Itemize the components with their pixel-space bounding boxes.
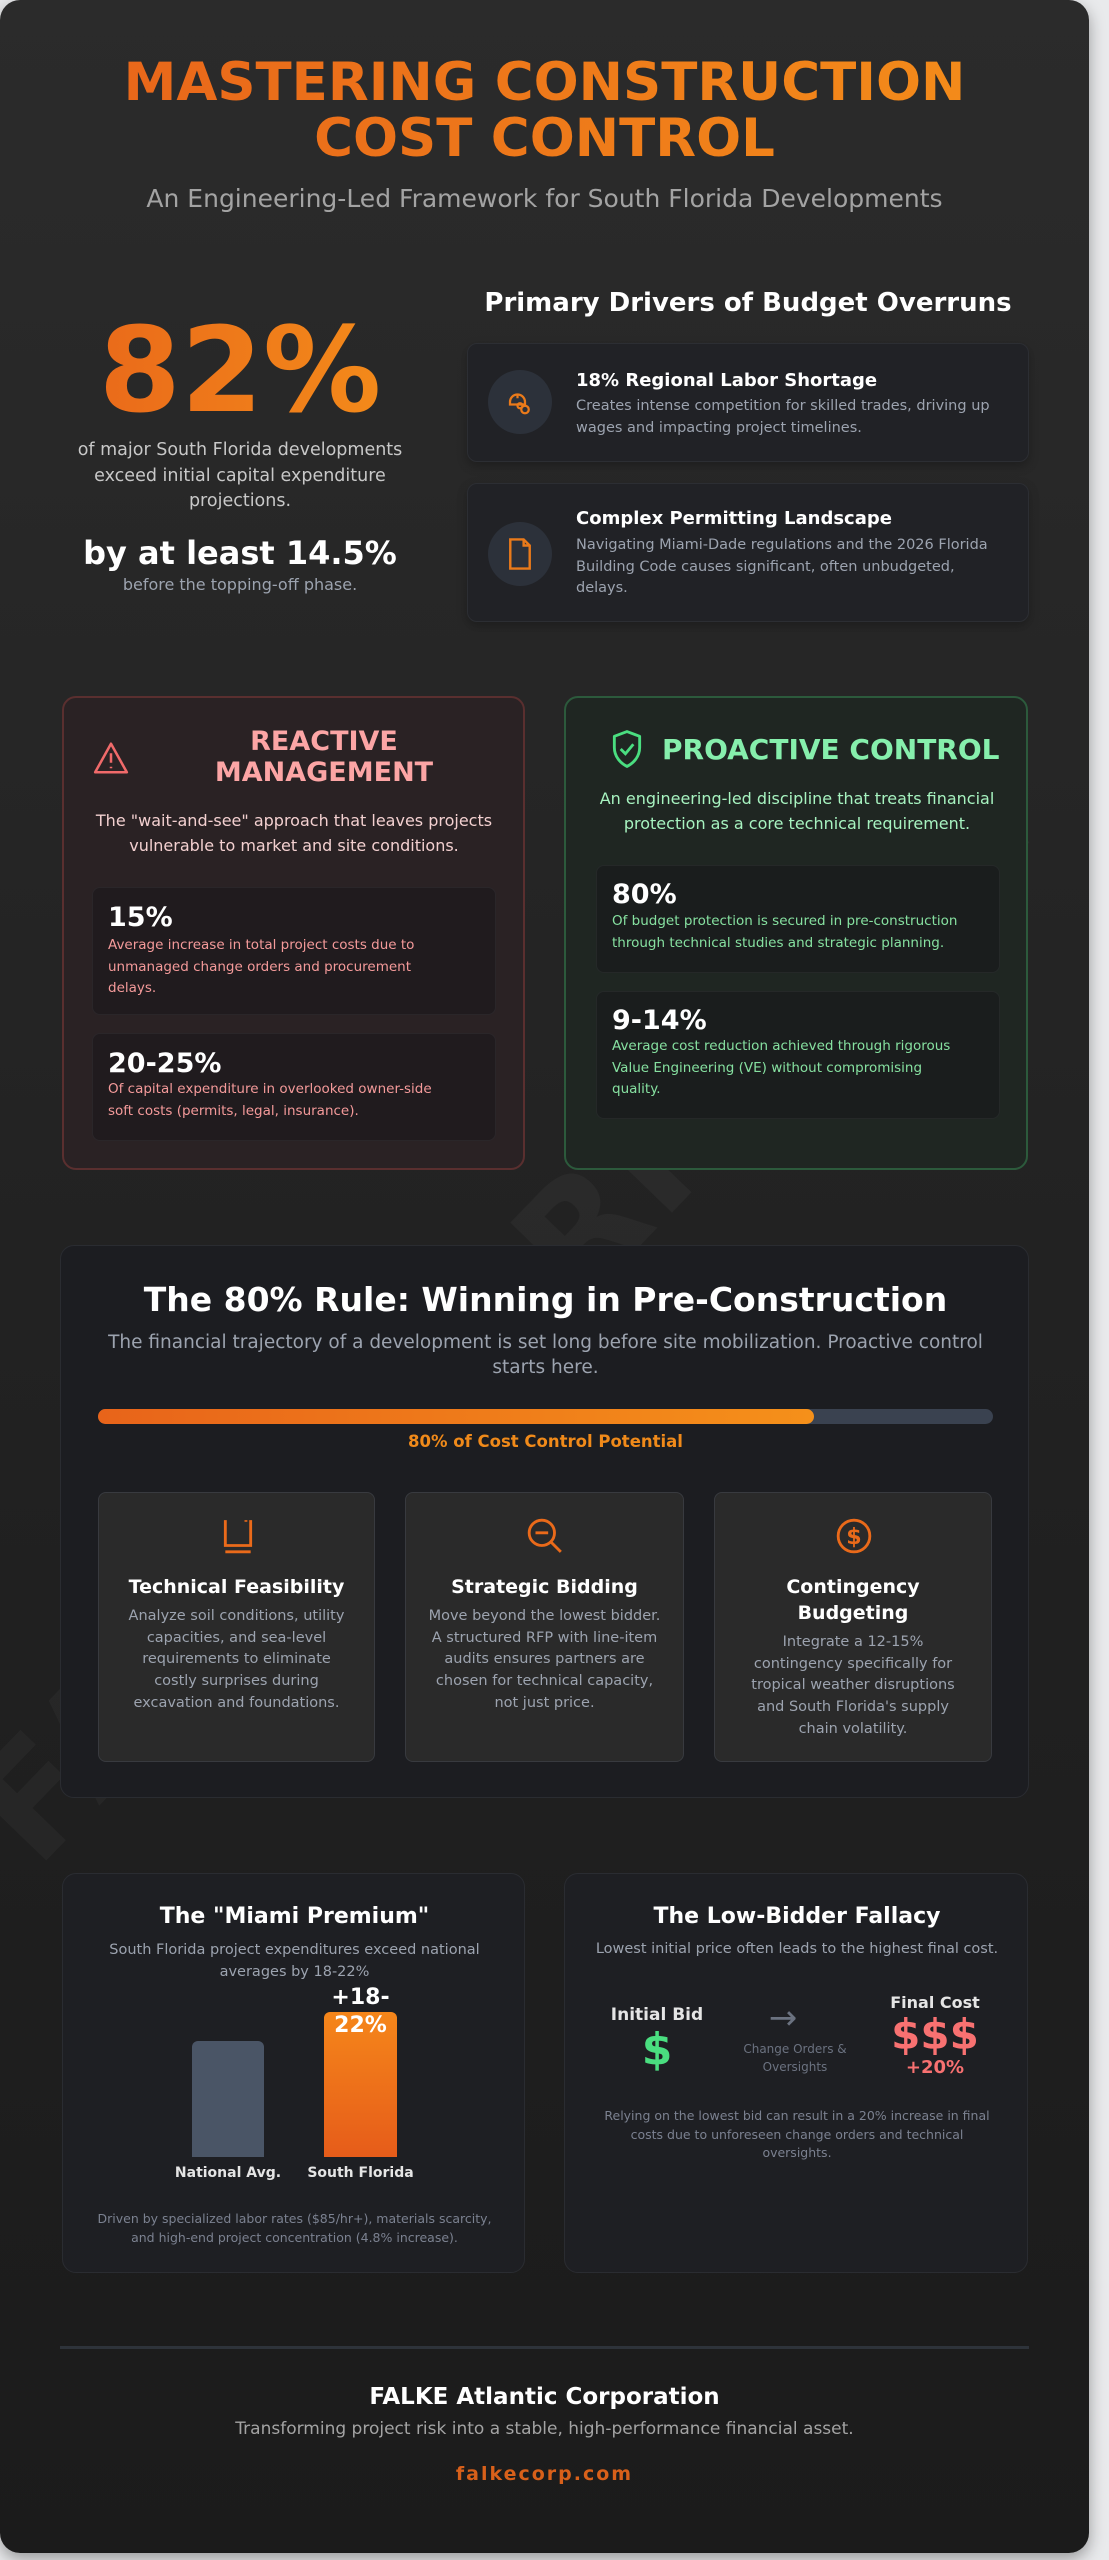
footer: FALKE Atlantic Corporation: [369, 2384, 720, 2410]
heading: primary drivers: Primary Drivers of Budget Overruns: [484, 288, 1012, 318]
card: strategic bidding: [405, 1492, 684, 1762]
description: An engineering-led discipline that treats financial protection as a core technical requirement.: [600, 789, 994, 833]
footnote: Relying on the lowest bid can result in a 20% increase in final costs due to unforeseen change orders and technical oversights.: [604, 2108, 990, 2160]
panel: low-bidder fallacy: Lowest initial price often leads to the highest final cost.: [596, 1941, 998, 1957]
stat: 82%: before the topping-off phase.: [123, 575, 357, 594]
bar chart: [175, 1985, 414, 2181]
stat: 9-14%: [596, 991, 1000, 1119]
heading: [215, 726, 433, 788]
panel: proactive control: [564, 696, 1028, 1170]
panel: miami premium: The "Miami Premium": [160, 1904, 429, 1929]
initial bid: $: [642, 2024, 672, 2075]
panel: driver permitting: Complex Permitting Landscape: [576, 508, 892, 529]
final cost: $$$: [891, 2010, 979, 2059]
stat: 15%: [92, 887, 496, 1015]
panel: driver permitting: [467, 483, 1029, 622]
stat: 82%: by at least 14.5%: [83, 534, 397, 572]
subtitle: The financial trajectory of a development is set long before site mobilization. Proactive control starts here.: [108, 1332, 983, 1378]
arrow: Change Orders &: [743, 2042, 847, 2056]
panel: miami premium: South Florida project expenditures exceed national averages by 18-22%: [109, 1942, 480, 1980]
card: contingency budgeting: Integrate a 12-15% contingency specifically for tropical weather disruptions and South Florida's supply chain volatility.: [751, 1634, 955, 1737]
description: The "wait-and-see" approach that leaves projects vulnerable to market and site conditions.: [96, 811, 492, 855]
footer: falkecorp.com: [456, 2463, 633, 2485]
footer: Transforming project risk into a stable, high-performance financial asset.: [235, 2419, 854, 2439]
arrow: [743, 1998, 847, 2074]
card: technical feasibility: Technical Feasibility: [129, 1576, 344, 1598]
card: technical feasibility: [98, 1492, 375, 1762]
bar chart: South Florida: [307, 2165, 414, 2181]
icon: beaker: [224, 1520, 252, 1554]
icon: document: [488, 522, 552, 586]
stat: 20-25%: [92, 1033, 496, 1141]
stat: 80%: [596, 865, 1000, 973]
icon: shield: [612, 730, 642, 768]
final cost: [890, 1993, 980, 2078]
stat: 82%: of major South Florida developments exceed initial capital expenditure projections.: [78, 440, 402, 511]
title: [0, 55, 1089, 167]
card: technical feasibility: Analyze soil conditions, utility capacities, and sea-level requirements to eliminate costly surprises during excavation and foundations.: [129, 1608, 344, 1711]
bar chart: +18-: [331, 1985, 390, 2010]
icon: warning: [94, 742, 128, 774]
card: contingency budgeting: Budgeting: [798, 1602, 908, 1624]
bar chart: 22%: [334, 2013, 387, 2038]
stat: 80%: 80%: [612, 879, 677, 910]
progress bar: [98, 1409, 993, 1424]
panel: reactive management: [62, 696, 525, 1170]
subtitle: An Engineering-Led Framework for South Florida Developments: [146, 184, 943, 213]
stat: 15%: Average increase in total project costs due to unmanaged change orders and procurement delays.: [108, 937, 414, 996]
card: contingency budgeting: Contingency: [786, 1576, 920, 1598]
panel: miami premium: [62, 1873, 525, 2273]
stat: 9-14%: 9-14%: [612, 1005, 707, 1036]
icon: magnifier: [528, 1518, 562, 1553]
stat: 82%: [78, 301, 402, 594]
panel: driver labor shortage: Creates intense competition for skilled trades, driving up wages and impacting project timelines.: [576, 398, 990, 436]
heading: MANAGEMENT: [215, 757, 433, 788]
icon: labor: [488, 370, 552, 434]
final cost: +20%: [906, 2057, 964, 2078]
panel: driver labor shortage: [467, 343, 1029, 462]
panel: low-bidder fallacy: [564, 1873, 1028, 2273]
panel: 80% rule: [60, 1245, 1029, 1798]
panel: driver permitting: Navigating Miami-Dade regulations and the 2026 Florida Building Code causes significant, often unbudgeted, delays.: [576, 537, 988, 596]
stat: 82%: 82%: [99, 301, 381, 439]
progress label: 80% of Cost Control Potential: [408, 1432, 683, 1451]
footnote: Driven by specialized labor rates ($85/hr+), materials scarcity, and high-end project concentration (4.8% increase).: [98, 2211, 491, 2245]
stat: 20-25%: Of capital expenditure in overlooked owner-side soft costs (permits, legal, insurance).: [108, 1081, 432, 1118]
final cost: Final Cost: [890, 1993, 980, 2012]
footer: [235, 2384, 854, 2485]
initial bid: [611, 2005, 703, 2075]
stat: 20-25%: 20-25%: [108, 1048, 221, 1079]
heading: REACTIVE: [250, 726, 398, 757]
card: strategic bidding: Strategic Bidding: [451, 1576, 638, 1598]
icon: dollar coin: [836, 1518, 872, 1554]
initial bid: Initial Bid: [611, 2005, 703, 2025]
card: strategic bidding: Move beyond the lowest bidder. A structured RFP with line-item audits ensures partners are chosen for technical capacity, not just price.: [429, 1608, 660, 1711]
heading: The 80% Rule: Winning in Pre-Construction: [144, 1280, 947, 1319]
stat: 80%: Of budget protection is secured in pre-construction through technical studies and strategic planning.: [612, 913, 957, 950]
panel: low-bidder fallacy: The Low-Bidder Fallacy: [654, 1904, 940, 1929]
heading: PROACTIVE CONTROL: [662, 733, 1000, 766]
icon: dollar coin: $: [846, 1524, 862, 1550]
stat: 9-14%: Average cost reduction achieved through rigorous Value Engineering (VE) without compromising quality.: [612, 1038, 950, 1097]
arrow: Oversights: [763, 2060, 827, 2074]
title: MASTERING CONSTRUCTION: [124, 52, 965, 113]
panel: driver labor shortage: 18% Regional Labor Shortage: [576, 370, 877, 391]
bar chart: National Avg.: [175, 2165, 281, 2181]
stat: 15%: 15%: [108, 902, 173, 933]
arrow: →: [769, 1998, 797, 2038]
title: COST CONTROL: [314, 108, 775, 169]
card: contingency budgeting: [714, 1492, 992, 1762]
